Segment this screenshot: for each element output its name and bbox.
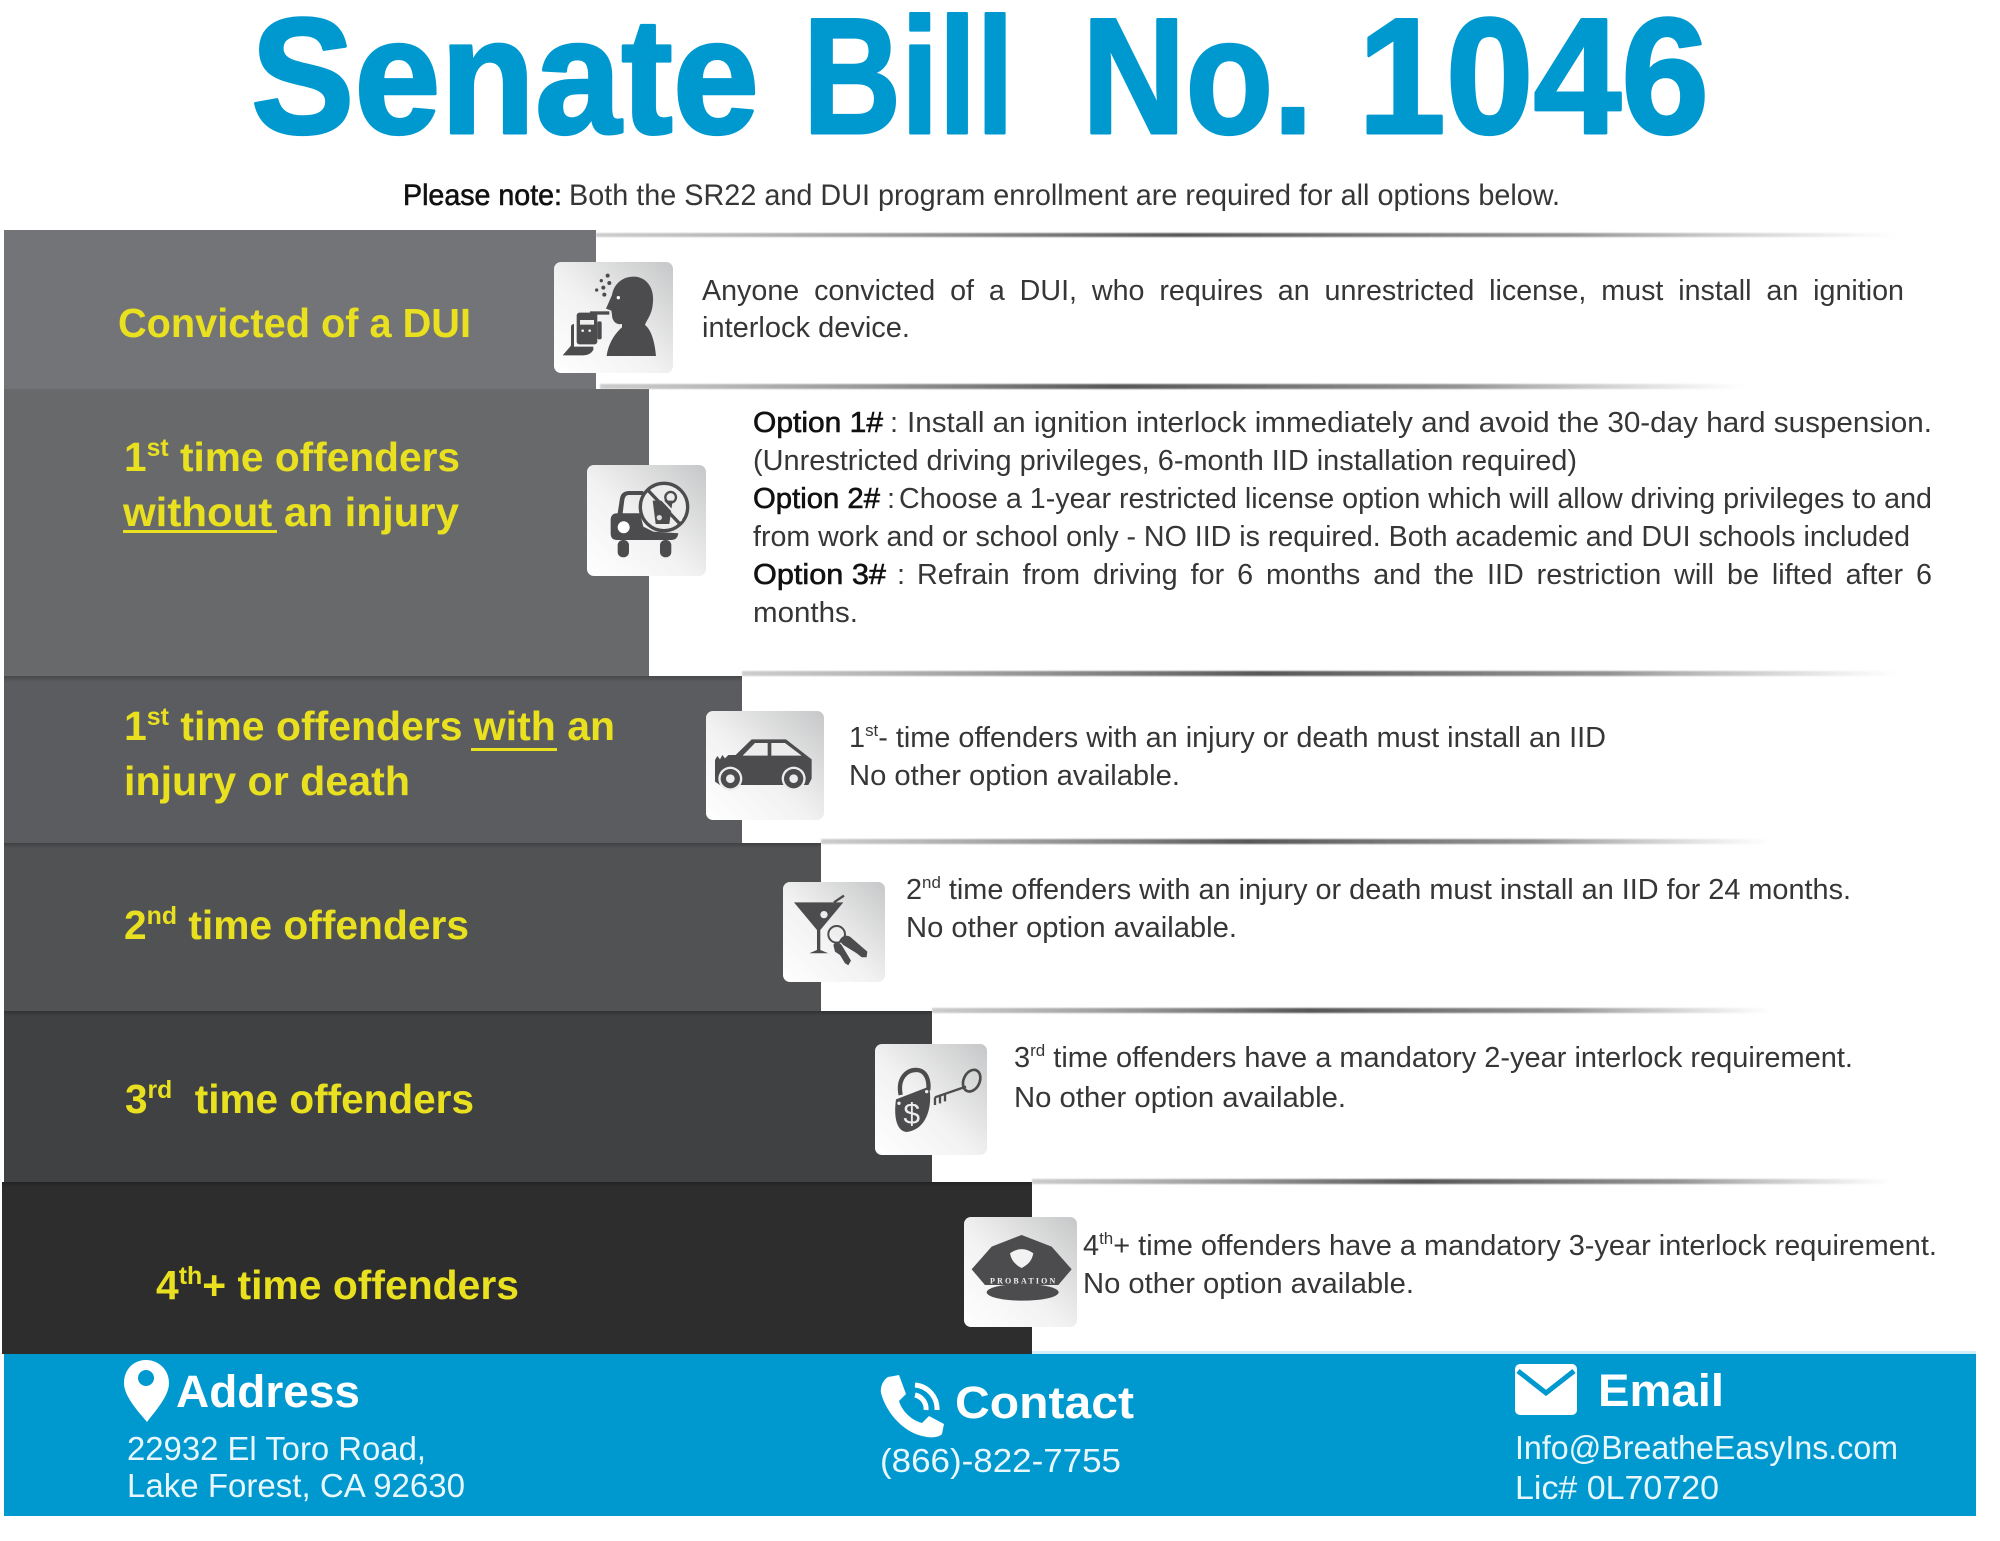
description: options: : [890, 407, 898, 439]
description: options: Refrain from driving for 6 months and the IID restriction will be lifted after 6 [917, 559, 1932, 591]
description: options: Option 2# [753, 483, 880, 515]
icon: probation officer hat [964, 1217, 1077, 1327]
contact block [880, 1375, 1134, 1479]
email block: Email [1598, 1365, 1724, 1416]
description: options: (Unrestricted driving privileges, 6-month IID installation required) [753, 445, 1577, 477]
description: second time [906, 873, 1851, 944]
icon: probation officer hat: PROBATION [990, 1276, 1056, 1285]
heading: first time offenders with an injury or death: st [147, 703, 170, 731]
heading: fourth plus time offenders: 4 [156, 1262, 179, 1308]
heading: third time offenders: time offenders [172, 1076, 474, 1122]
description: first time with injury: - time offenders with an injury or death must install an IID [878, 722, 1606, 754]
heading: first time offenders with an injury or death: injury or death [124, 758, 410, 804]
title [251, 0, 1709, 168]
heading: first time offenders without an injury [122, 434, 460, 535]
heading: fourth plus time offenders: + time offenders [202, 1262, 519, 1308]
panel: contact footer [4, 1351, 1976, 1516]
contact block: Contact [955, 1377, 1134, 1428]
icon: breathalyzer [554, 262, 673, 373]
heading: first time offenders with an injury or death: 1 [124, 703, 147, 749]
note text: Both the SR22 and DUI program enrollment are required for all options below. [569, 179, 1560, 212]
heading: second time offenders: 2 [124, 902, 147, 948]
icon: car with no drinking [587, 465, 706, 576]
description: second time: nd [922, 873, 941, 892]
contact block: (866)-822-7755 [880, 1442, 1121, 1479]
description: options: Choose a 1-year restricted license option which will allow driving privileges to and [899, 483, 1932, 515]
description: third time [1014, 1041, 1853, 1114]
email block [1515, 1364, 1898, 1506]
description: third time: 3 [1014, 1042, 1030, 1074]
description: fourth plus time [1083, 1229, 1937, 1300]
description: options: : [897, 559, 905, 591]
email block: Lic# 0L70720 [1515, 1469, 1719, 1506]
heading: first time offenders without an injury: st [147, 434, 169, 462]
description: fourth plus time: th [1099, 1229, 1113, 1248]
panel: convicted of a DUI [4, 230, 1904, 390]
description: third time: time offenders have a mandatory 2-year interlock requirement. [1045, 1042, 1853, 1074]
heading: fourth plus time offenders: th [179, 1262, 202, 1290]
icon: cocktail and keys [783, 882, 885, 982]
heading: first time offenders with an injury or death [124, 703, 615, 804]
description: second time: No other option available. [906, 912, 1237, 944]
description: first time with injury: 1 [849, 722, 865, 754]
address block [124, 1360, 465, 1504]
heading: second time offenders: nd [147, 902, 177, 930]
description: options: months. [753, 597, 858, 629]
description: convicted of a DUI [702, 275, 1904, 344]
panel: first time offenders with an injury or death [4, 671, 1897, 843]
description: options: Option 1# [753, 407, 883, 439]
heading: third time offenders: rd [148, 1076, 172, 1104]
description: third time: No other option available. [1014, 1082, 1346, 1114]
description: options: Option 3# [753, 559, 886, 591]
icon: envelope [1515, 1364, 1577, 1415]
heading: first time offenders with an injury or death: time offenders with an [169, 703, 615, 749]
description: second time: time offenders with an injury or death must install an IID for 24 months. [941, 874, 1851, 906]
address block: Lake Forest, CA 92630 [127, 1467, 465, 1504]
description: fourth plus time: + time offenders have a mandatory 3-year interlock requirement. [1113, 1230, 1937, 1262]
note text: Please note: [403, 179, 562, 212]
description: convicted of a DUI: Anyone convicted of a DUI, who requires an unrestricted license, must install an ignition [702, 275, 1904, 307]
description: fourth plus time: 4 [1083, 1230, 1099, 1262]
description: fourth plus time: No other option available. [1083, 1268, 1414, 1300]
description: second time: 2 [906, 874, 922, 906]
icon: lock and key: $ [903, 1098, 920, 1131]
panel: fourth plus time offenders [2, 1179, 1937, 1354]
description: options: from work and or school only - NO IID is required. Both academic and DUI schools included [753, 521, 1910, 553]
heading: second time offenders: time offenders [177, 902, 469, 948]
description: first time with injury [849, 721, 1606, 792]
description: first time with injury: No other option available. [849, 760, 1180, 792]
description: options: : [887, 483, 895, 515]
icon: phone [881, 1375, 944, 1437]
heading: convicted of a DUI: Convicted of a DUI [118, 300, 471, 346]
icon: lock and key [875, 1044, 987, 1155]
address block: Address [176, 1366, 360, 1417]
heading: first time offenders without an injury: time offenders [169, 434, 460, 480]
panel: second time offenders [4, 839, 1851, 1011]
icon: crashed car [706, 711, 824, 820]
description: convicted of a DUI: interlock device. [702, 312, 910, 344]
description: third time: rd [1030, 1041, 1045, 1060]
address block: 22932 El Toro Road, [127, 1430, 426, 1467]
heading: first time offenders without an injury: without an injury [122, 489, 459, 535]
description: options [753, 407, 1932, 629]
description: first time with injury: st [865, 721, 878, 740]
panel: first time offenders without an injury [4, 384, 1932, 676]
description: options: Install an ignition interlock immediately and avoid the 30-day hard suspension. [907, 407, 1932, 439]
email block: Info@BreatheEasyIns.com [1515, 1429, 1898, 1466]
icon: map pin [124, 1360, 169, 1422]
panel: third time offenders [4, 1008, 1853, 1182]
heading: third time offenders: 3 [125, 1076, 148, 1122]
heading: first time offenders without an injury: 1 [124, 434, 147, 480]
